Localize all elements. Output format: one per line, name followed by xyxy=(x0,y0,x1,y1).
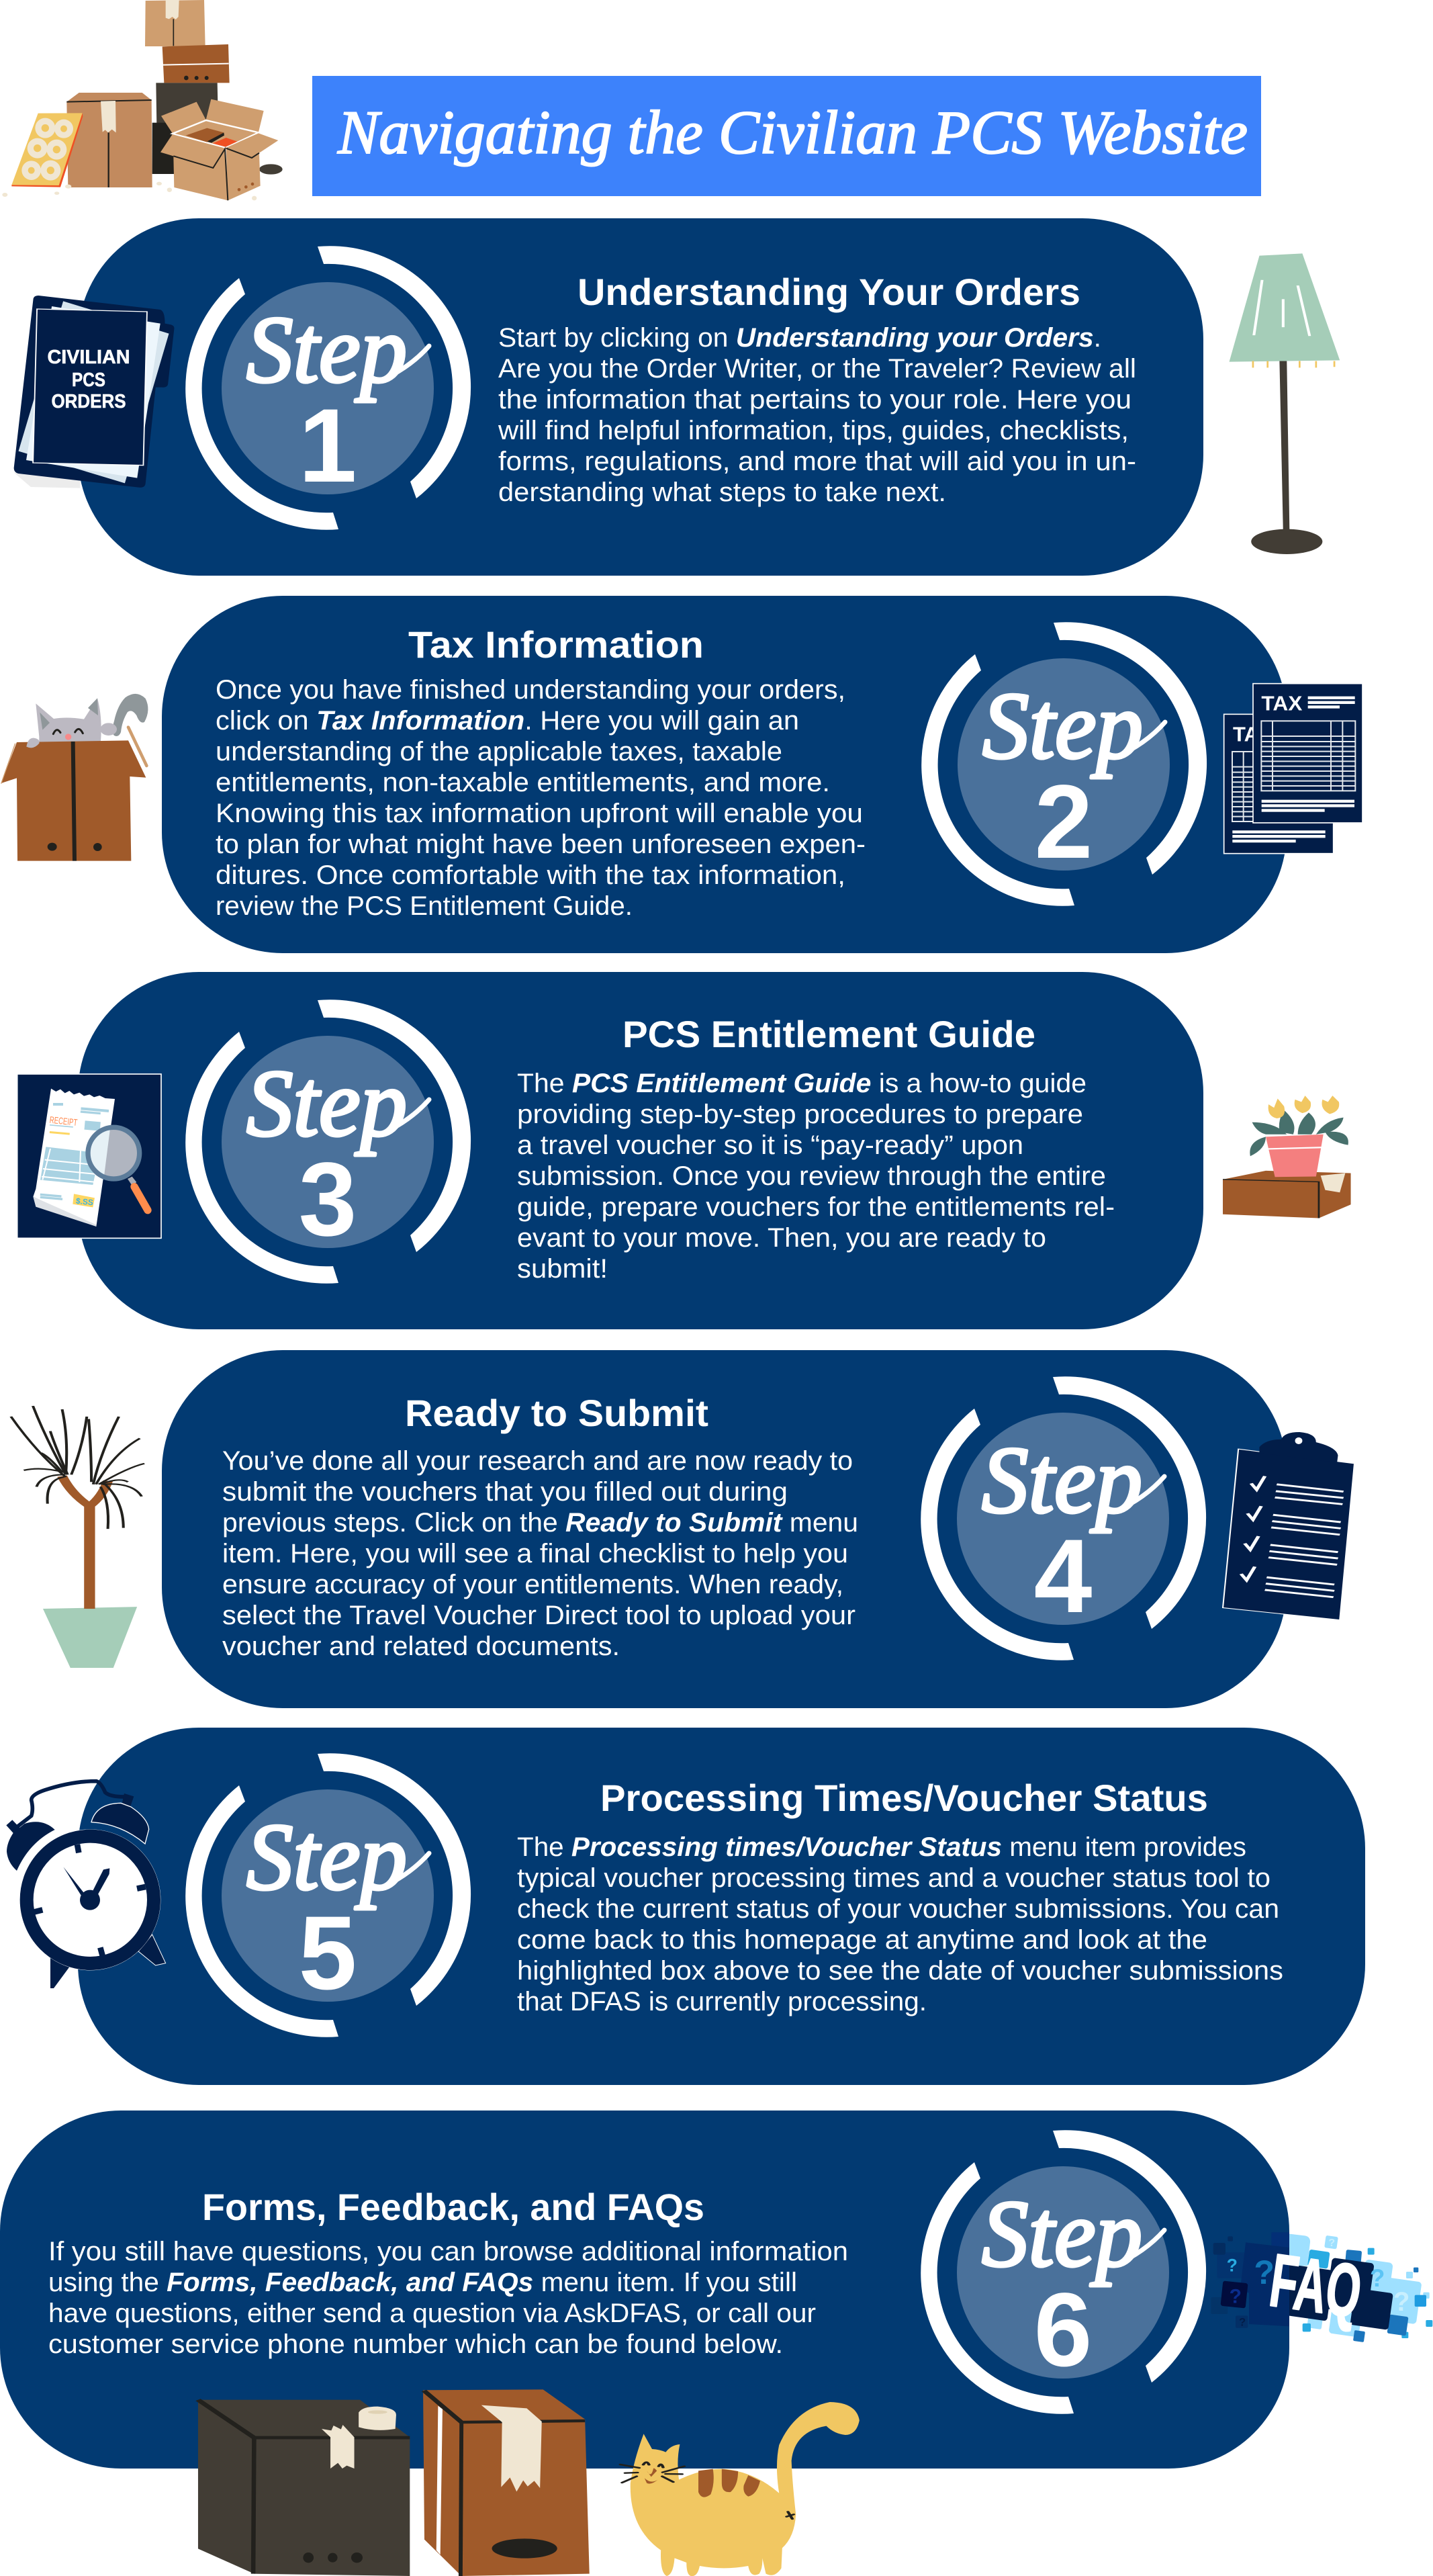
FAQ lettering: FAQ xyxy=(1265,2238,1367,2334)
icon: alarm clock xyxy=(6,1781,166,1988)
body text: that DFAS is currently processing. xyxy=(517,1987,927,2016)
heading: Forms, Feedback, and FAQs xyxy=(202,2186,704,2228)
icon: floor lamp xyxy=(1230,253,1340,554)
body text: voucher and related documents. xyxy=(222,1632,620,1661)
body text: review the PCS Entitlement Guide. xyxy=(216,891,633,921)
body text: will find helpful information, tips, guides, checklists, xyxy=(498,416,1129,445)
body text: entitlements, non-taxable entitlements, and more. xyxy=(216,768,830,797)
body text: ensure accuracy of your entitlements. When ready, xyxy=(222,1570,843,1599)
title banner: Navigating the Civilian PCS Website xyxy=(337,98,1248,167)
body text: to plan for what might have been unforeseen expen- xyxy=(216,830,866,859)
title banner xyxy=(312,76,1261,196)
panel: step 3 PCS entitlement guide xyxy=(78,972,1203,1329)
step 1 badge xyxy=(185,246,471,530)
body text: previous steps. Click on the Ready to Submit menu xyxy=(222,1508,858,1538)
body text: forms, regulations, and more that will aid you in un- xyxy=(498,447,1136,476)
step 5 badge xyxy=(185,1753,471,2037)
panel: step 2 tax information xyxy=(162,596,1287,953)
body text: submission. Once you review through the entire xyxy=(517,1161,1106,1191)
body text: Are you the Order Writer, or the Traveler? Review all xyxy=(498,354,1136,384)
body text: click on Tax Information . Here you will gain an xyxy=(216,706,799,736)
question marks: ? xyxy=(1227,2256,1238,2276)
icon: civilian PCS orders folder: ORDERS xyxy=(51,391,126,412)
heading: Ready to Submit xyxy=(405,1392,708,1434)
panel: step 6 forms, feedback and FAQs xyxy=(0,2111,1289,2469)
body text: Once you have finished understanding your orders, xyxy=(216,675,845,705)
body text: providing step-by-step procedures to prepare xyxy=(517,1100,1083,1129)
step 6 badge: Step xyxy=(982,2180,1142,2286)
body text: using the Forms, Feedback, and FAQs menu item. If you still xyxy=(48,2268,797,2297)
body text: ditures. Once comfortable with the tax information, xyxy=(216,860,845,890)
heading: Processing Times/Voucher Status xyxy=(600,1777,1208,1819)
question marks: ? xyxy=(1370,2264,1385,2292)
icon: civilian PCS orders folder: CIVILIAN xyxy=(47,347,130,368)
body text: Knowing this tax information upfront will enable you xyxy=(216,799,863,828)
body text: submit! xyxy=(517,1254,608,1284)
body text: item. Here, you will see a final checklist to help you xyxy=(222,1539,848,1568)
step 3 badge: 3 xyxy=(299,1141,357,1258)
question marks: ? xyxy=(1328,2237,1335,2249)
icon: moving boxes and orange cat xyxy=(198,2389,860,2576)
body text xyxy=(517,1069,1115,1284)
icon: flower pot on box xyxy=(1223,1096,1351,1218)
body text: submit the vouchers that you filled out during xyxy=(222,1477,788,1507)
step 6 badge xyxy=(921,2130,1206,2414)
icon: FAQ graphic xyxy=(1211,2232,1432,2342)
body text: a travel voucher so it is “pay-ready” upon xyxy=(517,1130,1023,1160)
step 5 badge: 5 xyxy=(299,1895,357,2012)
body text xyxy=(222,1446,858,1661)
step 4 badge xyxy=(921,1376,1206,1660)
body text: select the Travel Voucher Direct tool to upload your xyxy=(222,1601,856,1630)
icon: cat in a box xyxy=(1,694,148,861)
body text: come back to this homepage at anytime and look at the xyxy=(517,1925,1207,1955)
icon: tax forms xyxy=(1224,684,1362,854)
body text: evant to your move. Then, you are ready to xyxy=(517,1223,1046,1253)
icon: civilian PCS orders folder xyxy=(14,296,174,488)
step 1 badge: 1 xyxy=(299,388,357,504)
icon: stack of moving boxes xyxy=(2,0,283,200)
step 4 badge: Step xyxy=(982,1427,1142,1533)
body text xyxy=(517,1832,1283,2016)
heading: Understanding Your Orders xyxy=(577,271,1080,313)
step 1 badge: Step xyxy=(246,296,407,402)
question marks xyxy=(1227,2237,1409,2329)
body text: You’ve done all your research and are now ready to xyxy=(222,1446,853,1476)
icon: clipboard checklist xyxy=(1223,1432,1354,1620)
body text: Start by clicking on Understanding your Orders . xyxy=(498,323,1101,353)
step 5 badge: Step xyxy=(246,1804,407,1910)
step 2 badge xyxy=(921,622,1207,906)
heading: Tax Information xyxy=(408,623,704,666)
body text: check the current status of your voucher submissions. You can xyxy=(517,1894,1279,1924)
panel: step 4 ready to submit xyxy=(162,1350,1287,1708)
icon: tax forms: TA xyxy=(1233,722,1259,746)
dark box xyxy=(198,2400,410,2576)
icon: tax forms: TAX xyxy=(1261,691,1303,715)
body text xyxy=(48,2237,848,2359)
panel: step 1 understanding your orders xyxy=(78,218,1203,576)
body text: If you still have questions, you can browse additional information xyxy=(48,2237,848,2266)
icon: potted tree xyxy=(11,1406,144,1668)
body text: guide, prepare vouchers for the entitlements rel- xyxy=(517,1192,1115,1222)
body text: customer service phone number which can be found below. xyxy=(48,2329,783,2359)
heading: PCS Entitlement Guide xyxy=(622,1013,1035,1055)
question marks: ? xyxy=(1230,2285,1242,2307)
step 4 badge: 4 xyxy=(1034,1518,1092,1635)
price tag: $.SS xyxy=(75,1196,94,1207)
body text: The PCS Entitlement Guide is a how-to guide xyxy=(517,1069,1087,1098)
body text: understanding of the applicable taxes, taxable xyxy=(216,737,782,766)
cat xyxy=(620,2402,860,2576)
body text: highlighted box above to see the date of voucher submissions xyxy=(517,1956,1283,1986)
step 3 badge xyxy=(185,1000,471,1284)
question marks: ? xyxy=(1239,2316,1246,2329)
body text: The Processing times/Voucher Status menu item provides xyxy=(517,1832,1246,1862)
step 6 badge: 6 xyxy=(1034,2272,1092,2389)
body text: have questions, either send a question via AskDFAS, or call our xyxy=(48,2299,816,2328)
panel: step 5 processing times and voucher status xyxy=(78,1728,1365,2085)
icon: receipt and magnifying glass xyxy=(17,1074,161,1238)
step 3 badge: Step xyxy=(246,1050,407,1156)
brown box xyxy=(423,2389,590,2576)
icon: civilian PCS orders folder: PCS xyxy=(72,369,105,391)
body text xyxy=(216,675,866,921)
body text xyxy=(498,323,1136,507)
receipt label: RECEIPT xyxy=(49,1114,78,1128)
question marks: ? xyxy=(1254,2254,1275,2291)
step 2 badge: 2 xyxy=(1035,764,1093,881)
body text: the information that pertains to your role. Here you xyxy=(498,385,1131,414)
body text: typical voucher processing times and a voucher status tool to xyxy=(517,1863,1270,1893)
question marks: ? xyxy=(1393,2287,1409,2317)
step 2 badge: Step xyxy=(982,672,1143,779)
body text: derstanding what steps to take next. xyxy=(498,478,946,507)
